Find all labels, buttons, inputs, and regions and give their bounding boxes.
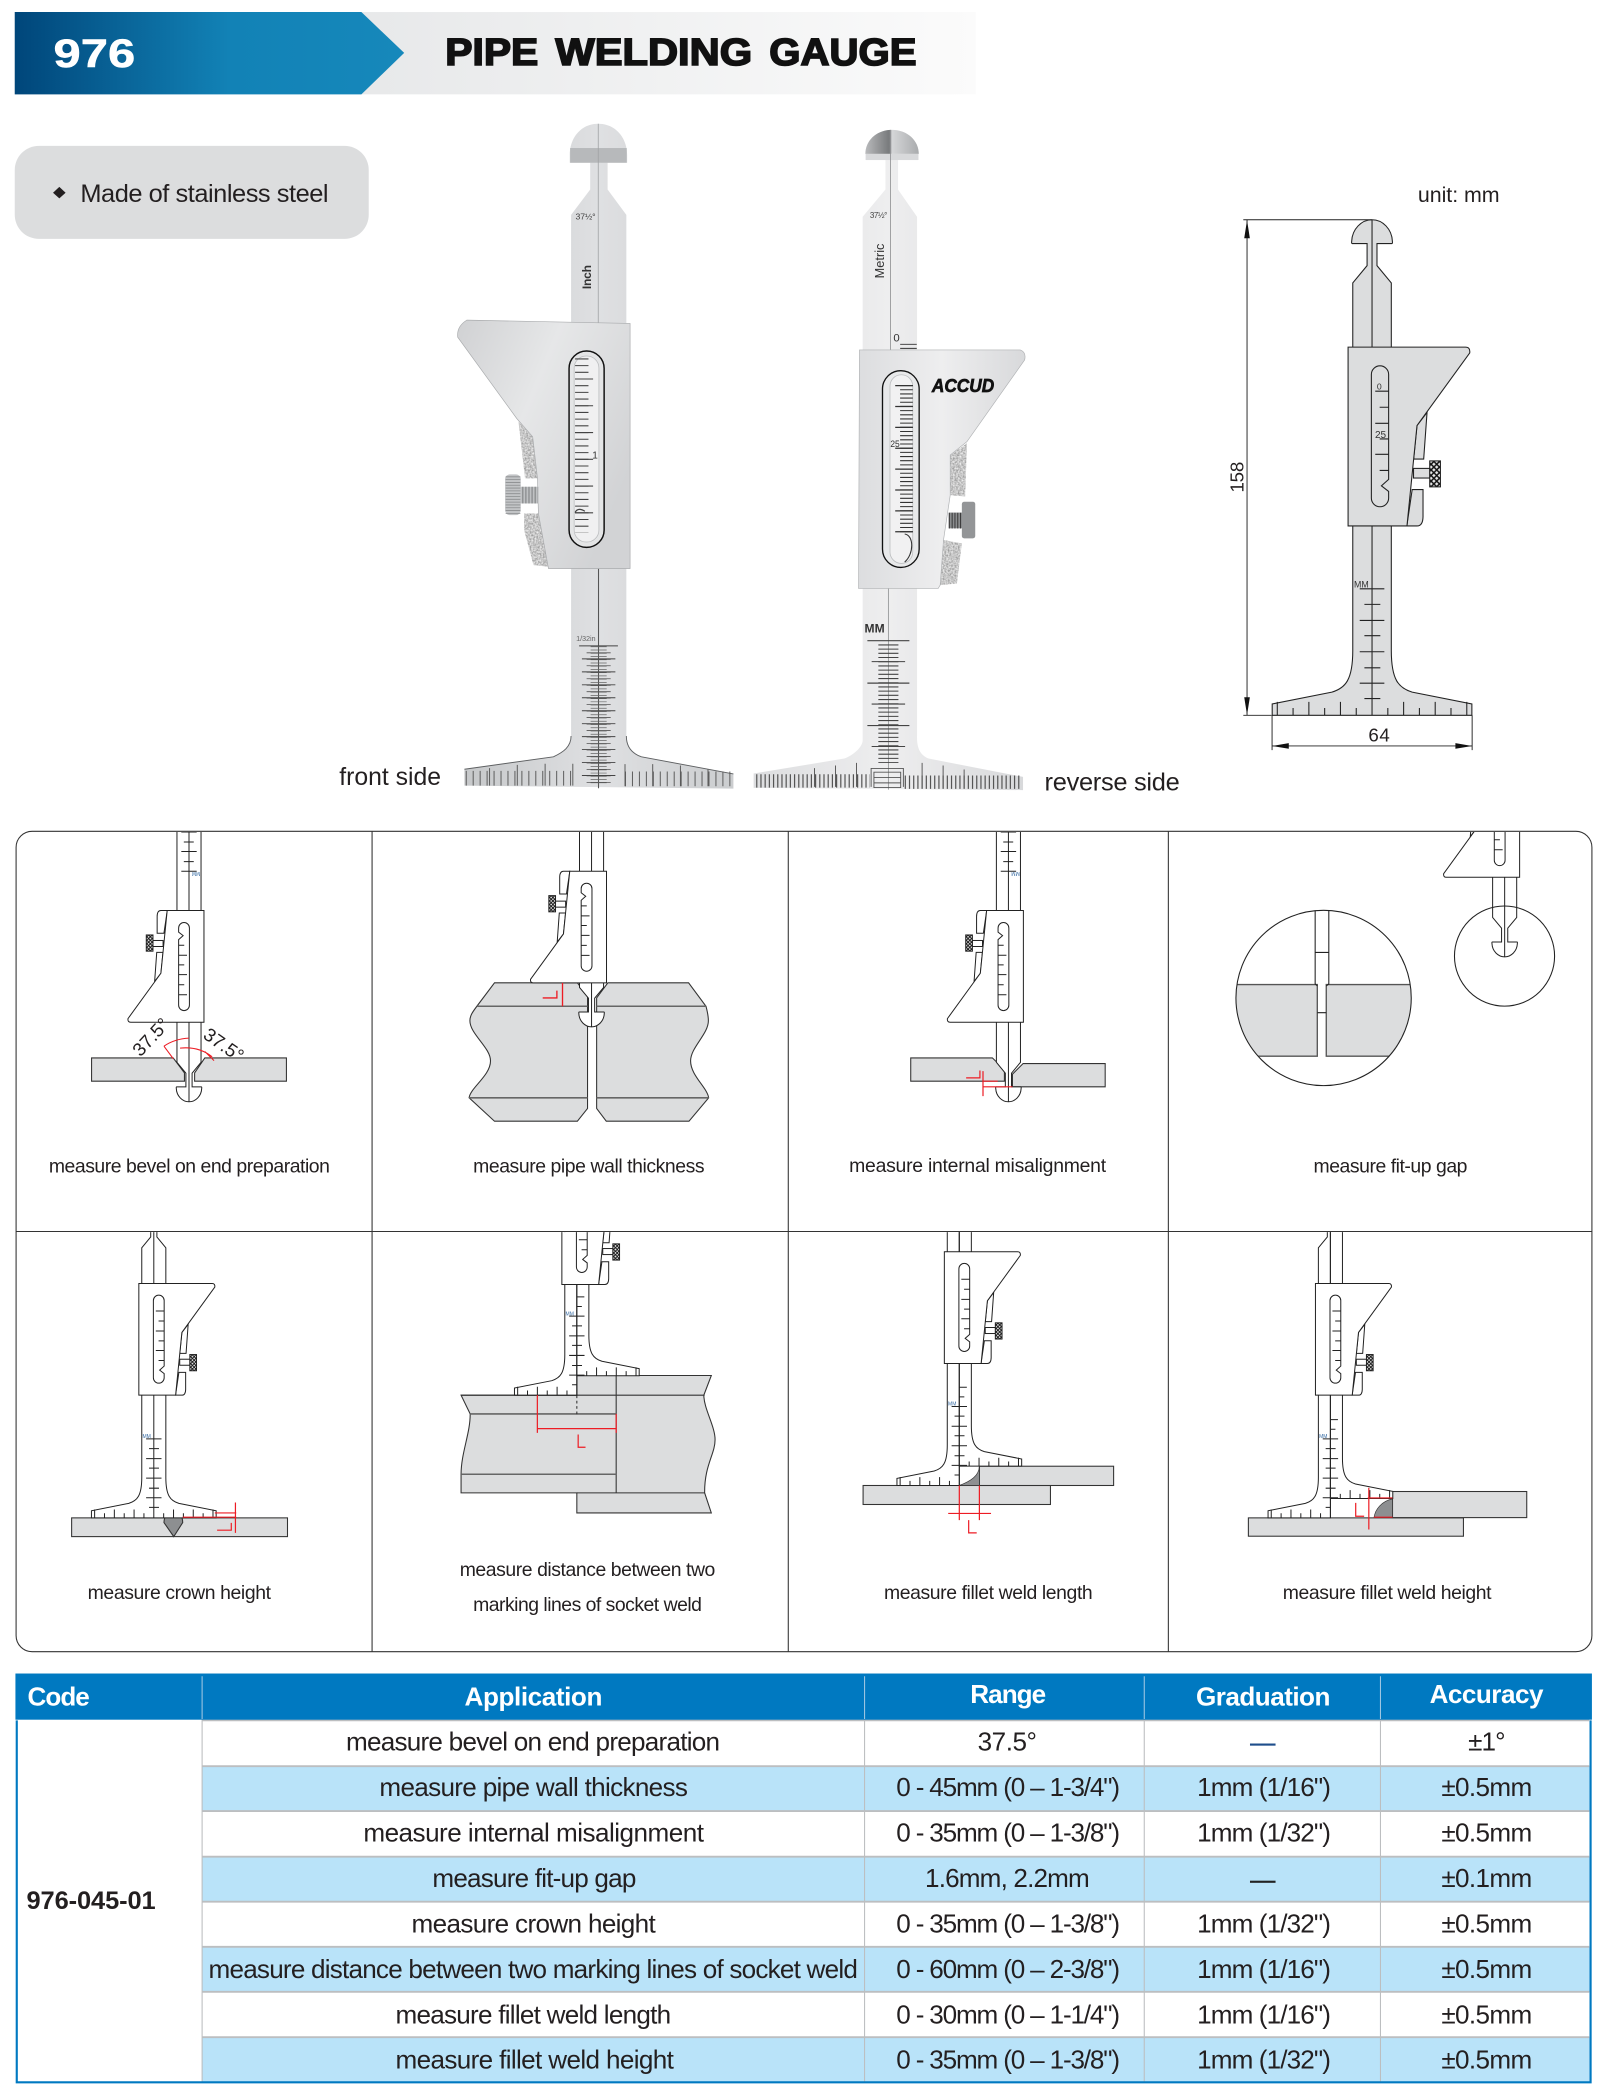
- row: misalignment: 1mm (1/32"): [1197, 1817, 1331, 1847]
- table header: Application: [465, 1682, 602, 1712]
- row: fillet height: 0 - 35mm (0 – 1-3/8"): [896, 2044, 1120, 2074]
- gauge: [1268, 1232, 1394, 1518]
- title: [445, 32, 916, 74]
- row: fillet length: ±0.5mm: [1441, 1999, 1532, 2029]
- row: fillet height: [395, 2044, 1532, 2074]
- gauge: [946, 832, 1024, 1102]
- red dimension L: [1356, 1488, 1393, 1530]
- gauge: [896, 1232, 1022, 1486]
- angle labels: 37.5°: [128, 1014, 174, 1060]
- gauge: [91, 1208, 216, 1518]
- row: bevel: 37.5°: [978, 1726, 1037, 1756]
- usage panel grid: [16, 830, 1592, 1652]
- offset plates: [911, 1058, 1105, 1087]
- panel: measure bevel: [49, 792, 330, 1178]
- unit note: unit: mm: [1418, 183, 1500, 207]
- row: crown height: [412, 1908, 1532, 1938]
- gauge outline drawing: 25: [1375, 430, 1387, 441]
- panel: measure socket weld distance: [460, 1232, 716, 1615]
- plates with fillet: [863, 1466, 1114, 1504]
- photo: reverse side of gauge: 25: [890, 439, 900, 449]
- panel: measure crown height: [72, 1208, 287, 1604]
- dimension: height 158: 158: [1226, 462, 1247, 492]
- caption: measure pipe wall thickness: [473, 1156, 705, 1178]
- feature pill: Made of stainless steel: [80, 180, 329, 208]
- table header: [15, 1674, 1592, 1720]
- panel: measure fillet weld height: [1248, 1232, 1528, 1603]
- row: fit-up gap: 1.6mm, 2.2mm: [925, 1863, 1090, 1893]
- gauge: MM: [192, 870, 200, 876]
- photo: front side of gauge: Inch: [580, 265, 594, 289]
- row: misalignment: measure internal misalignment: [363, 1817, 705, 1847]
- gauge: MM: [143, 1434, 151, 1440]
- photo: reverse side of gauge: MM: [865, 621, 885, 635]
- row: crown height: 1mm (1/32"): [1197, 1908, 1331, 1938]
- red dimension L: [537, 1395, 616, 1447]
- row: fillet height: measure fillet weld height: [395, 2044, 675, 2074]
- row: socket weld: measure distance between two marking lines of socket weld: [209, 1954, 858, 1984]
- dimension: width 64: 64: [1368, 724, 1390, 745]
- photo: front side of gauge: [458, 124, 733, 789]
- photo: reverse side of gauge: ACCUD: [931, 375, 994, 396]
- plates: [1248, 1492, 1527, 1536]
- gauge: MM: [1011, 870, 1020, 876]
- table header: Graduation: [1196, 1682, 1330, 1712]
- row: pipe wall: measure pipe wall thickness: [379, 1772, 688, 1802]
- fillet weld: [1374, 1499, 1393, 1518]
- gauge: [530, 832, 607, 1028]
- caption: measure fillet weld height: [1283, 1582, 1492, 1604]
- caption: measure fillet weld length: [884, 1582, 1093, 1604]
- photo: front side of gauge: 1: [592, 450, 598, 461]
- blue arrow code tab: 976: [54, 31, 135, 76]
- fillet weld: [959, 1466, 979, 1485]
- magnified circle detail: [1232, 908, 1415, 1086]
- photo: reverse side of gauge: [754, 130, 1025, 790]
- row: bevel: ±1°: [1468, 1726, 1506, 1756]
- gauge: MM: [566, 1311, 574, 1317]
- row: fillet length: 1mm (1/16"): [1197, 1999, 1331, 2029]
- plate with weld: [72, 1513, 287, 1537]
- panel: measure internal misalignment: [849, 792, 1107, 1177]
- row: fillet height: ±0.5mm: [1441, 2044, 1532, 2074]
- row: fillet height: 1mm (1/32"): [1197, 2044, 1331, 2074]
- row: crown height: measure crown height: [412, 1908, 657, 1938]
- row: fillet length: measure fillet weld length: [395, 1999, 671, 2029]
- photo: front side of gauge: 1/32in: [576, 634, 596, 643]
- gauge in small circle: [1443, 832, 1556, 1007]
- red dimension L: [543, 983, 563, 1006]
- header banner: [15, 12, 976, 94]
- dimension: width 64: [1272, 715, 1472, 750]
- table row backgrounds: [17, 1676, 1591, 2082]
- row: socket weld: 0 - 60mm (0 – 2-3/8"): [896, 1954, 1120, 1984]
- gauge: [514, 1232, 640, 1396]
- row: fillet length: 0 - 30mm (0 – 1-1/4"): [896, 1999, 1120, 2029]
- caption: measure fit-up gap: [1314, 1156, 1467, 1178]
- caption: measure internal misalignment: [849, 1155, 1107, 1177]
- title: GAUGE: [769, 32, 916, 74]
- feature pill: [15, 146, 369, 239]
- red dimension L: [948, 1485, 991, 1533]
- table header: Accuracy: [1430, 1679, 1544, 1709]
- row: misalignment: ±0.5mm: [1441, 1817, 1532, 1847]
- row: misalignment: [363, 1817, 1532, 1847]
- row: pipe wall: 0 - 45mm (0 – 1-3/4"): [896, 1772, 1120, 1802]
- label: front side: front side: [339, 764, 441, 791]
- title: WELDING: [555, 32, 752, 74]
- caption: marking lines of socket weld: [473, 1594, 702, 1616]
- row: socket weld: [209, 1954, 1532, 1984]
- pipe section: [469, 983, 709, 1121]
- gauge: [127, 832, 204, 1102]
- table header: Code: [27, 1682, 90, 1712]
- photo: reverse side of gauge: Metric: [872, 243, 887, 278]
- caption: measure bevel on end preparation: [49, 1156, 330, 1178]
- row: socket weld: ±0.5mm: [1441, 1954, 1532, 1984]
- gauge: MM: [948, 1402, 956, 1408]
- label: reverse side: reverse side: [1045, 768, 1180, 796]
- gauge outline drawing: 0: [1377, 382, 1382, 392]
- row: socket weld: 1mm (1/16"): [1197, 1954, 1331, 1984]
- dimensioned technical drawing: [1226, 220, 1472, 750]
- gauge: MM: [1319, 1434, 1327, 1440]
- panel: measure pipe wall thickness: [468, 832, 710, 1176]
- panel: measure fillet weld length: [863, 1157, 1114, 1604]
- dimension: height 158: [1226, 220, 1372, 715]
- blue arrow code tab: [15, 12, 404, 94]
- row: fit-up gap: [432, 1863, 1532, 1893]
- title: PIPE: [445, 32, 538, 74]
- row: fit-up gap: measure fit-up gap: [432, 1863, 636, 1893]
- table header: Range: [970, 1679, 1046, 1709]
- gauge outline drawing: [1272, 220, 1472, 715]
- row: misalignment: 0 - 35mm (0 – 1-3/8"): [896, 1817, 1120, 1847]
- red dimension L: [966, 1070, 1012, 1096]
- red dimension L: [183, 1502, 236, 1533]
- photo: reverse side of gauge: 0: [893, 333, 900, 345]
- photo: front side of gauge: 37½°: [575, 211, 596, 221]
- rough bracket castings: [940, 443, 967, 585]
- row: pipe wall: ±0.5mm: [1441, 1772, 1532, 1802]
- panel: measure fit-up gap: [1232, 647, 1567, 1178]
- gauge outline drawing: MM: [1354, 580, 1369, 590]
- row: bevel: [346, 1726, 1506, 1756]
- bevel plates: [92, 1058, 286, 1081]
- socket pipes: [461, 1375, 715, 1513]
- specification table: [15, 1674, 1592, 2082]
- angle labels: 37.5°: [200, 1024, 248, 1066]
- caption: [460, 1559, 715, 1616]
- code cell: 976-045-01: [27, 1887, 156, 1915]
- angle labels: [128, 1014, 248, 1066]
- row: pipe wall: [379, 1772, 1532, 1802]
- row: bevel: measure bevel on end preparation: [346, 1726, 720, 1756]
- row: fillet length: [395, 1999, 1532, 2029]
- caption: measure crown height: [88, 1582, 272, 1604]
- rough bracket castings: [518, 422, 548, 567]
- caption: measure distance between two: [460, 1559, 715, 1581]
- row: fit-up gap: ±0.1mm: [1441, 1863, 1532, 1893]
- row: crown height: ±0.5mm: [1441, 1908, 1532, 1938]
- red angle marks: [164, 1038, 214, 1061]
- row: pipe wall: 1mm (1/16"): [1197, 1772, 1331, 1802]
- photo: reverse side of gauge: 37½°: [870, 211, 887, 220]
- row: crown height: 0 - 35mm (0 – 1-3/8"): [896, 1908, 1120, 1938]
